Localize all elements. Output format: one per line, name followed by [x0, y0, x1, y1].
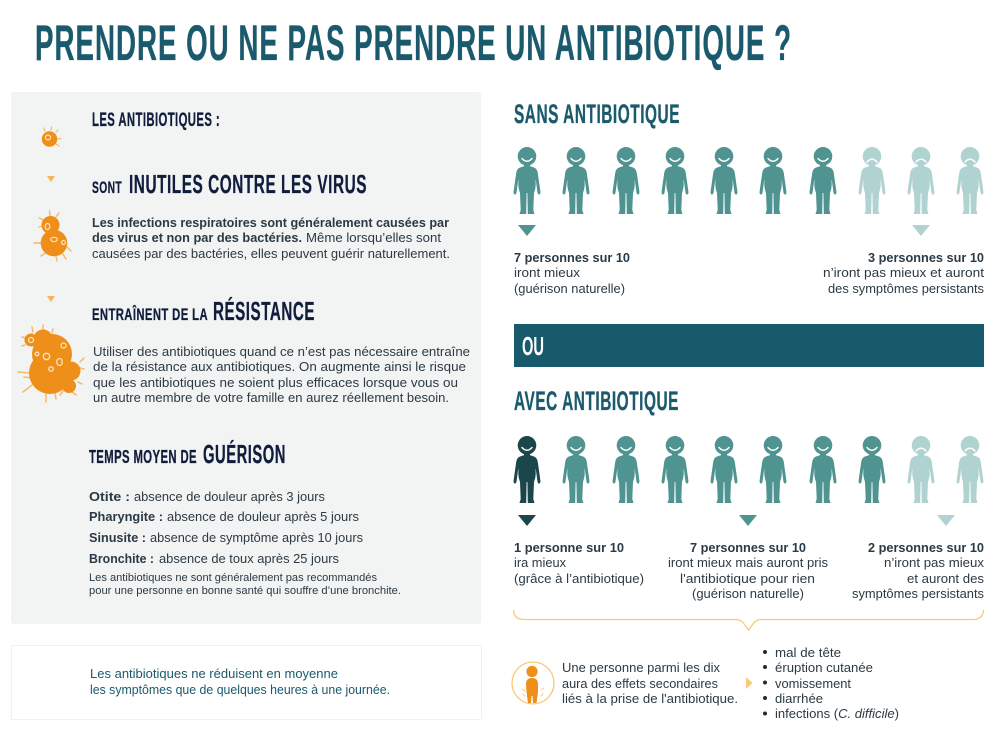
text: effets secondaires: liés à la prise de l'antibiotique.	[562, 691, 738, 706]
icon: person with stomach ache	[512, 662, 554, 704]
heading: temps moyen de guérison	[89, 439, 286, 469]
heading: inutiles contre les virus: INUTILES CONTRE LES VIRUS	[129, 169, 367, 199]
text: note bronchite: pour une personne en bonne santé qui souffre d’une bronchite.	[89, 585, 401, 597]
heading: résistance: RÉSISTANCE	[213, 296, 315, 326]
heading: inutiles contre les virus: SONT	[92, 178, 122, 197]
text: 7 personnes sur 10 pour rien: l'antibiotique pour rien	[680, 571, 815, 586]
icon: dividing bacterium	[34, 211, 71, 261]
text: note bronchite: Les antibiotiques ne sont généralement pas recommandés	[89, 572, 377, 584]
panel: antibiotiques	[11, 92, 481, 624]
banner: ou	[514, 324, 984, 367]
list: effets secondaires: vomissement	[775, 676, 851, 691]
text: 7 personnes sur 10	[514, 250, 630, 296]
text: 7 personnes sur 10: iront mieux	[514, 265, 581, 280]
text: temps de guérison list	[89, 489, 363, 566]
text: infections respiratoires: Les infections respiratoires sont généralement causées par	[92, 215, 449, 230]
text: temps de guérison list: absence de symptôme après 10 jours	[150, 530, 363, 545]
text: 1 personne sur 10: 1 personne sur 10	[514, 540, 624, 555]
heading: résistance	[92, 296, 315, 326]
text: 7 personnes sur 10: (guérison naturelle)	[514, 281, 625, 296]
arrow: right	[746, 677, 752, 689]
text: résistance	[93, 344, 470, 405]
text: 2 personnes sur 10: et auront des	[907, 571, 985, 586]
text: 1 personne sur 10: (grâce à l’antibiotique)	[514, 571, 644, 586]
text: temps de guérison list: absence de douleur après 5 jours	[167, 509, 359, 524]
brace	[514, 610, 984, 630]
text: 1 personne sur 10: ira mieux	[514, 555, 566, 570]
text: temps de guérison list: absence de toux après 25 jours	[159, 551, 339, 566]
text: 3 personnes sur 10	[823, 250, 984, 296]
icon: resistant bacteria cluster	[18, 325, 84, 402]
heading: résistance: ENTRAÎNENT DE LA	[92, 305, 208, 324]
heading: inutiles contre les virus	[92, 169, 367, 199]
text: infections respiratoires: des virus et non par des bactéries.	[92, 230, 302, 245]
chart: personnes sans antibiotique	[514, 147, 983, 236]
text: résistance: Utiliser des antibiotiques quand ce n’est pas nécessaire entraîne	[93, 344, 470, 359]
heading: avec antibiotique: AVEC ANTIBIOTIQUE	[514, 386, 679, 416]
list: effets secondaires: infections (C. difficile)	[775, 706, 899, 721]
text: 7 personnes sur 10 pour rien: 7 personnes sur 10	[690, 540, 806, 555]
text: 7 personnes sur 10 pour rien	[668, 540, 828, 601]
text: résistance: de la résistance aux antibiotiques. On augmente ainsi le risque	[93, 359, 466, 374]
text: 2 personnes sur 10: symptômes persistants	[852, 586, 984, 601]
text: temps de guérison list: absence de douleur après 3 jours	[134, 489, 325, 504]
text: 3 personnes sur 10: des symptômes persistants	[828, 281, 984, 296]
text: 2 personnes sur 10	[852, 540, 985, 601]
text: note bronchite	[89, 572, 401, 597]
text: résistance: que les antibiotiques ne soient plus efficaces lorsque vous ou	[93, 375, 458, 390]
text: temps de guérison list: Pharyngite :	[89, 509, 163, 524]
text: temps de guérison list: Sinusite :	[89, 530, 146, 545]
arrow: down 2	[47, 296, 55, 302]
list: effets secondaires: éruption cutanée	[775, 660, 873, 675]
list: effets secondaires: mal de tête	[775, 645, 841, 660]
text: 2 personnes sur 10: 2 personnes sur 10	[868, 540, 984, 555]
heading: temps moyen de guérison: GUÉRISON	[203, 439, 286, 469]
panel: réduction des symptômes	[12, 646, 482, 720]
icon: small bacterium	[42, 127, 61, 147]
banner: ou: OU	[522, 331, 544, 361]
text: 7 personnes sur 10 pour rien: (guérison naturelle)	[692, 586, 804, 601]
heading: les antibiotiques: LES ANTIBIOTIQUES :	[92, 110, 220, 131]
text: 3 personnes sur 10: n’iront pas mieux et auront	[823, 265, 984, 280]
text: effets secondaires: Une personne parmi les dix	[562, 660, 720, 675]
text: temps de guérison list: Bronchite :	[89, 551, 154, 566]
panel: réduction des symptômes: Les antibiotiques ne réduisent en moyenne	[90, 666, 338, 681]
text: 7 personnes sur 10 pour rien: iront mieux mais auront pris	[668, 555, 828, 570]
text: infections respiratoires: causées par des bactéries, elles peuvent guérir naturellement.	[92, 246, 450, 261]
heading: sans antibiotique: SANS ANTIBIOTIQUE	[514, 99, 680, 129]
text: 3 personnes sur 10: 3 personnes sur 10	[868, 250, 984, 265]
arrow: down 1	[47, 176, 55, 182]
heading: temps moyen de guérison: TEMPS MOYEN DE	[89, 447, 197, 467]
panel: réduction des symptômes: les symptômes que de quelques heures à une journée.	[90, 682, 390, 697]
text: résistance: un autre membre de votre famille en aurez réellement besoin.	[93, 390, 449, 405]
text: effets secondaires: aura des effets secondaires	[562, 676, 718, 691]
text: 2 personnes sur 10: n’iront pas mieux	[884, 555, 984, 570]
text: infections respiratoires: Même lorsqu’elles sont	[306, 230, 441, 245]
text: infections respiratoires	[92, 215, 450, 261]
text: 1 personne sur 10	[514, 540, 644, 586]
text: 7 personnes sur 10: 7 personnes sur 10	[514, 250, 630, 265]
list: effets secondaires	[763, 645, 899, 721]
chart: personnes avec antibiotique	[514, 436, 983, 526]
list: effets secondaires: diarrhée	[775, 691, 823, 706]
text: effets secondaires	[562, 660, 738, 706]
text: temps de guérison list: Otite :	[89, 489, 130, 504]
